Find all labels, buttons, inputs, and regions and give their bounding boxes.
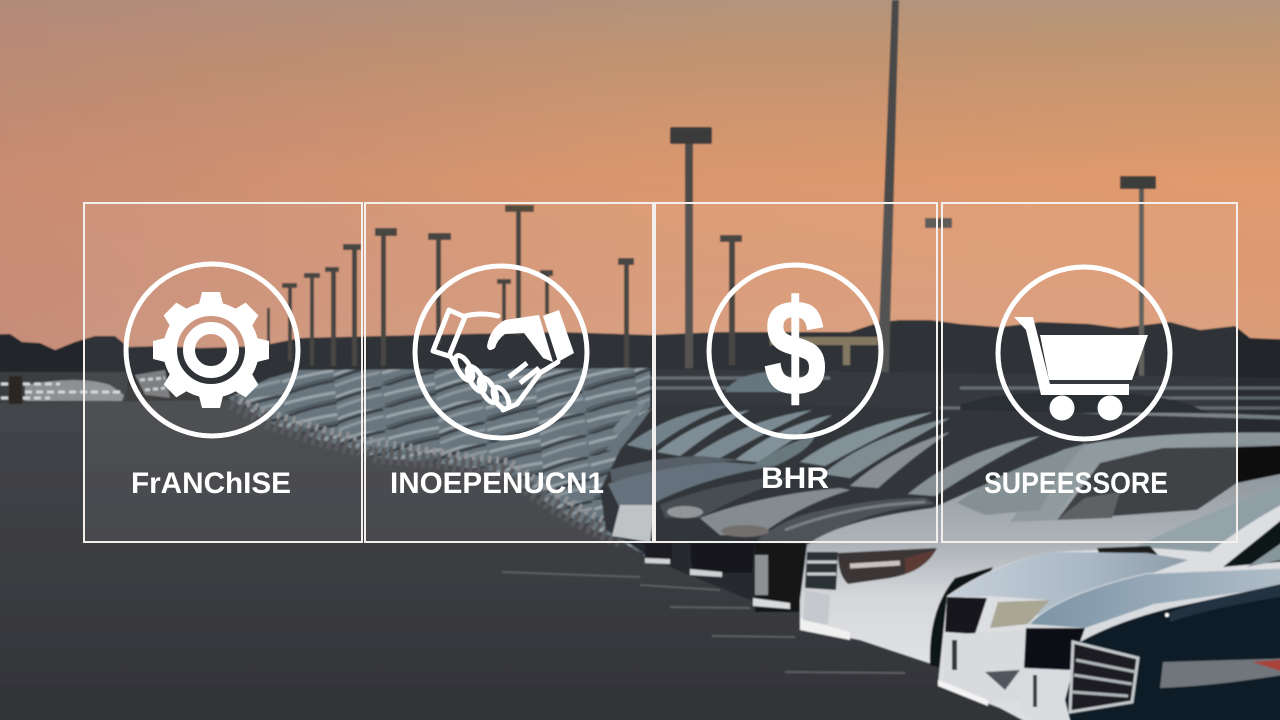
- label: independent: INOEPENUCN1: [390, 467, 604, 500]
- lower hoods: [608, 456, 935, 545]
- row of cars: near dark section: [600, 404, 1280, 720]
- icon: dollar sign in circle: [709, 265, 881, 437]
- icon: gear in circle: [126, 264, 298, 436]
- icon: shopping cart in circle: [998, 267, 1170, 439]
- panel: franchise: [84, 203, 362, 542]
- tree line: [0, 320, 1280, 385]
- parking lines: [502, 572, 905, 673]
- icon: handshake in circle: [415, 266, 587, 438]
- windshields: [606, 400, 1040, 496]
- light poles: [267, 0, 1156, 405]
- white car one: [800, 433, 1280, 670]
- far row right: [600, 368, 1280, 450]
- label: superstore: SUPEESSORE: [984, 467, 1168, 500]
- panel frame: superstore: [942, 203, 1237, 542]
- panel: superstore: [942, 203, 1237, 542]
- white car two: [938, 478, 1280, 720]
- label: franchise: FrANChISE: [131, 467, 291, 500]
- icon: dollar sign in circle: $: [764, 273, 826, 422]
- panel: independent: [365, 203, 653, 542]
- distant bridge: [770, 337, 878, 365]
- row of cars: mottled far section: [228, 368, 650, 560]
- panel frame: franchise: [84, 203, 362, 542]
- panel frame: buy here pay here: [655, 203, 937, 542]
- white car three: [1021, 568, 1280, 720]
- distant cars left: [0, 370, 170, 404]
- label: bhr: BHR: [761, 462, 829, 495]
- asphalt ground: [0, 400, 1280, 720]
- panel frame: independent: [365, 203, 653, 542]
- sky: [0, 0, 1280, 375]
- dark car front: [1065, 580, 1280, 720]
- car fronts in the row: [612, 505, 806, 612]
- panel: buy here pay here: [655, 203, 937, 542]
